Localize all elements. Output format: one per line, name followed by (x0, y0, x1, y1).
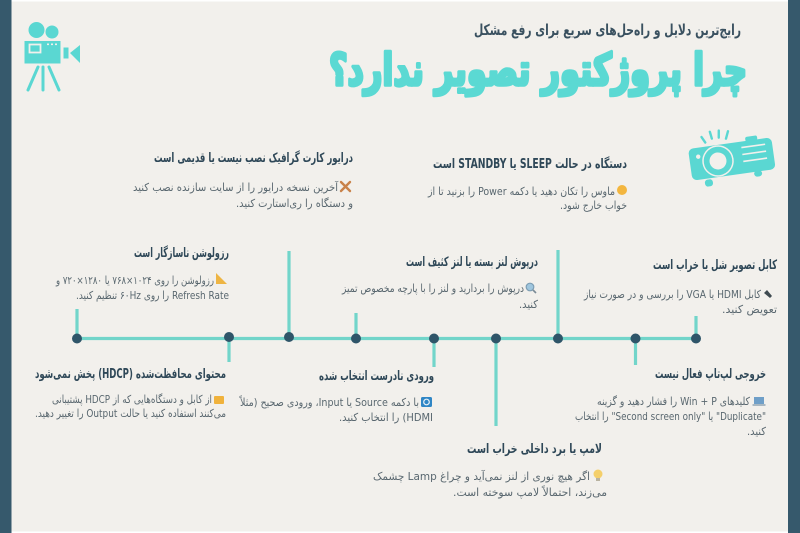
panel: laptop output: کنید. (747, 425, 767, 438)
panel: wrong input: ورودی نادرست انتخاب شده (319, 369, 434, 384)
panel: lamp or board (373, 442, 607, 499)
icon: light bulb (594, 470, 602, 481)
panel: lamp or board: اگر هیچ نوری از لنز نمی‌آید و چراغ Lamp چشمک (373, 469, 590, 483)
right frame bar (788, 0, 800, 533)
icon: sleeping face (617, 185, 627, 195)
panel: loose cable (583, 258, 777, 316)
panel: graphics driver (133, 150, 353, 210)
panel: HDCP: می‌کنند استفاده کنید یا حالت Output را تغییر دهید. (35, 407, 226, 420)
panel: resolution: رزولوشن را روی ۱۰۲۴×۷۶۸ یا ۱۲۸۰×۷۲۰ و (55, 274, 214, 287)
panel: standby: خواب خارج شود. (560, 199, 627, 212)
icon: refresh (421, 397, 432, 407)
panel: loose cable: کابل HDMI یا VGA را بررسی و در صورت نیاز (583, 288, 762, 301)
icon: magnifier (526, 283, 536, 293)
panel: lens cap (341, 255, 539, 311)
timeline stems (77, 250, 696, 426)
panel: wrong input: با دکمه Source یا Input، ورودی صحیح (مثلاً (239, 394, 419, 409)
icon: tools (341, 182, 350, 191)
panel: lamp or board: لامپ یا برد داخلی خراب است (467, 442, 602, 457)
timeline markers (72, 332, 701, 344)
panel: laptop output: کلیدهای Win + P را فشار دهید و گزینه (597, 395, 751, 408)
panel: HDCP: محتوای محافظت‌شده (HDCP) پخش نمی‌شود (35, 367, 226, 382)
panel: standby: ماوس را تکان دهید یا دکمه Power را بزنید تا از (427, 185, 615, 198)
panel: resolution (55, 245, 229, 302)
icon: laptop (752, 397, 766, 406)
icon: plug (764, 290, 772, 298)
panel: wrong input: HDMI) را انتخاب کنید. (339, 411, 433, 424)
panel: resolution: Refresh Rate را روی ۶۰Hz تنظیم کنید. (76, 289, 229, 302)
icon: lock (214, 396, 224, 404)
panel: graphics driver: درایور کارت گرافیک نصب نیست یا قدیمی است (154, 150, 353, 166)
panel: wrong input (239, 369, 434, 424)
panel: standby: دستگاه در حالت SLEEP یا STANDBY است (433, 156, 627, 172)
panel: lens cap: کنید. (519, 298, 539, 311)
icon: ruler triangle (216, 273, 227, 284)
panel: HDCP: از کابل و دستگاه‌هایی که از HDCP پشتیبانی (52, 393, 212, 406)
panel: resolution: رزولوشن ناسازگار است (134, 245, 229, 261)
panel: standby (427, 156, 627, 212)
panel: lens cap: درپوش را بردارید و لنز را با پارچه مخصوص تمیز (341, 282, 524, 295)
panel: loose cable: تعویض کنید. (722, 303, 777, 316)
panel: graphics driver: آخرین نسخه درایور را از سایت سازنده نصب کنید (133, 180, 339, 194)
left frame bar (0, 0, 12, 533)
panel: lamp or board: می‌زند، احتمالاً لامپ سوخته است. (453, 484, 607, 499)
panel: laptop output (575, 367, 767, 438)
panel: HDCP (35, 367, 226, 420)
panel: laptop output: "Duplicate" یا "Second screen only" را انتخاب (575, 410, 766, 423)
icon: projector (686, 123, 777, 189)
icon: film camera (24, 22, 80, 90)
timeline axis (77, 337, 696, 340)
panel: graphics driver: و دستگاه را ری‌استارت کنید. (236, 197, 353, 210)
panel: lens cap: درپوش لنز بسته یا لنز کثیف است (406, 255, 538, 270)
timeline (72, 250, 701, 426)
